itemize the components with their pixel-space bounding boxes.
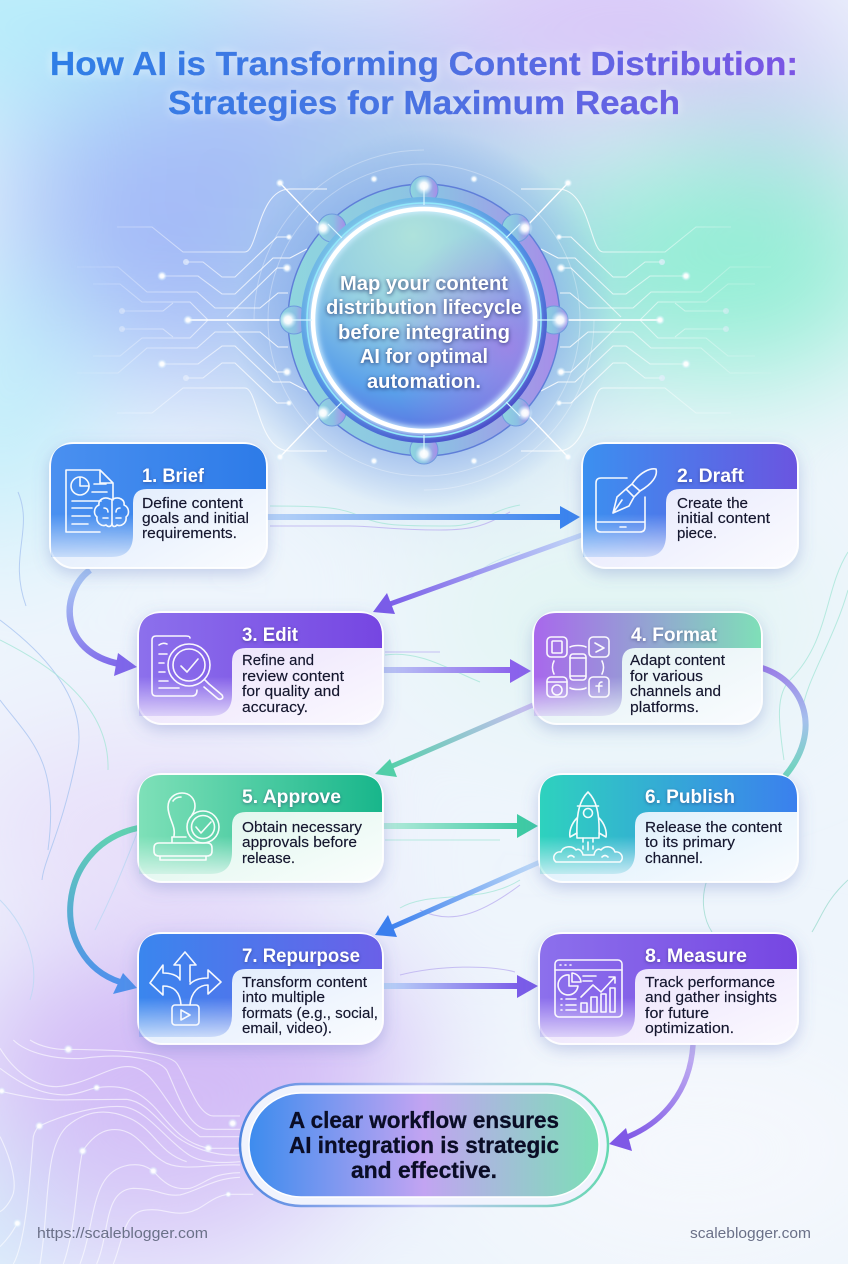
decorative flowing circuit lines, lower left [0,1040,253,1264]
description: piece. [677,526,717,542]
description: optimization. [645,1021,734,1037]
arrow: measure to summary [609,1045,693,1151]
panel: step 1 brief [50,443,267,568]
description [630,653,725,716]
description: accuracy. [242,700,308,716]
icon: branching arrows and video [150,952,221,1025]
description: Release the content [645,820,782,836]
summary text: A clear workflow ensures [289,1107,559,1133]
callout: summary pill [240,1084,608,1206]
title: Strategies for Maximum Reach [168,84,680,121]
decorative wavy lines [0,492,848,1000]
icon: analytics dashboard [555,960,622,1017]
hub message: before integrating [338,322,510,344]
icon: approval stamp [154,793,219,860]
summary text [289,1107,559,1183]
arrow: draft to edit [373,535,582,614]
arrow: format to publish [762,668,806,776]
description: review content [242,669,344,685]
icon: rocket [554,792,622,862]
arrow: approve to repurpose [70,828,138,994]
description: channels and [630,684,721,700]
panel: step 2 draft [582,443,798,568]
heading: 7. Repurpose [242,945,360,967]
description [242,653,344,716]
hub message: automation. [367,371,481,393]
description: channel. [645,851,703,867]
description: requirements. [142,526,237,542]
description: into multiple [242,990,325,1006]
arrow: brief to draft [267,506,580,529]
description [645,820,782,867]
arrow: approve to publish [383,814,538,838]
heading: 8. Measure [645,945,747,967]
icon: document and brain [66,470,128,532]
description: Adapt content [630,653,725,669]
panel: step 5 approve [138,774,383,882]
description: email, video). [242,1021,332,1037]
hub message: AI for optimal [360,346,488,368]
description: Create the [677,496,748,512]
description: goals and initial [142,511,249,527]
summary text: AI integration is strategic [289,1132,559,1158]
panel: step 4 format [533,612,762,724]
heading: 1. Brief [142,465,204,487]
icon: tablet and pen [596,469,656,532]
description: to its primary [645,835,736,851]
description: Obtain necessary [242,820,363,836]
summary text: and effective. [351,1157,497,1183]
arrow: brief to edit [70,570,137,676]
description: Define content [142,496,243,512]
description [677,496,770,542]
footer: source url: https://scaleblogger.com [37,1226,208,1242]
description: initial content [677,511,770,527]
description [645,975,777,1037]
panel: step 8 measure [539,933,798,1044]
heading: 5. Approve [242,786,341,808]
panel: step 3 edit [138,612,383,724]
icon: channels and devices [547,637,609,697]
description [242,820,363,867]
heading: 2. Draft [677,465,745,487]
description: for future [645,1006,709,1022]
description: Refine and [242,653,314,669]
description: formats (e.g., social, [242,1006,378,1022]
panel: step 7 repurpose [138,933,383,1044]
description: and gather insights [645,990,777,1006]
description: Transform content [242,975,367,991]
description [142,496,249,542]
central circuit hub [77,130,771,510]
icon: document under magnifier [152,636,223,699]
panel: step 6 publish [539,774,798,882]
description: for quality and [242,684,340,700]
footer: brand: scaleblogger.com [690,1226,811,1242]
heading: 3. Edit [242,624,298,646]
hub message [326,273,522,393]
arrow: repurpose to measure [383,975,538,998]
arrow: publish to repurpose [375,862,540,937]
description: approvals before [242,835,357,851]
hub message: Map your content [340,273,508,295]
title: How AI is Transforming Content Distribution: [50,45,798,82]
arrow: format to approve [375,705,533,777]
description: platforms. [630,700,699,716]
hub message: distribution lifecycle [326,297,522,319]
description: Track performance [645,975,775,991]
description: for various [630,669,703,685]
description: release. [242,851,295,867]
title [50,45,798,121]
arrow: edit to format [383,659,531,683]
heading: 4. Format [631,624,717,646]
description [242,975,378,1037]
heading: 6. Publish [645,786,735,808]
